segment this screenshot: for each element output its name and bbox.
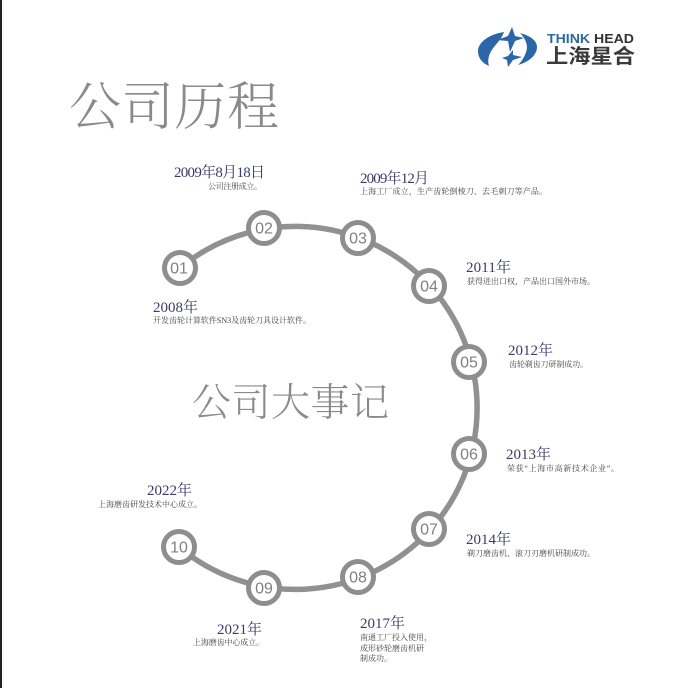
icon: blue swoosh emblem with stars: [478, 27, 537, 67]
event 2012: 2012年: [508, 341, 553, 359]
event 2009-08: [174, 163, 265, 191]
event 2022: 2022年: [147, 481, 192, 499]
node 08: 08: [349, 570, 367, 586]
node 05: [454, 346, 484, 378]
event 2017: 成形砂轮磨齿机研: [360, 643, 424, 653]
event 2012: 齿轮剃齿刀研制成功。: [509, 359, 588, 369]
event 2017: 2017年: [360, 614, 405, 632]
node 06: 06: [460, 446, 478, 464]
event 2021: 2021年: [217, 620, 262, 638]
event 2009-12: 2009年12月: [360, 169, 429, 187]
node 10: [164, 532, 194, 562]
node 01: [164, 252, 196, 284]
node 05: 05: [460, 354, 478, 372]
node 07: [414, 514, 444, 544]
event 2013: 2013年: [506, 445, 551, 463]
node 03: [342, 222, 374, 254]
node 08: [342, 562, 374, 592]
center heading: 公司大事记: [192, 372, 389, 428]
logo wordmark: THINK HEAD: [547, 32, 634, 46]
event 2009-08: 公司注册成立。: [208, 181, 262, 191]
event 2009-12: 上海工厂成立，生产齿轮倒棱刀、去毛刺刀等产品。: [360, 186, 547, 197]
event 2008: 2008年: [153, 298, 198, 316]
node 01: 01: [170, 260, 188, 278]
node 03: 03: [349, 230, 367, 248]
node 06: [454, 438, 484, 470]
event 2021: [193, 620, 264, 647]
node 02: [248, 212, 280, 244]
node 10: 10: [170, 540, 188, 556]
logo: [478, 27, 635, 69]
event 2012: [508, 341, 588, 369]
node 04: 04: [420, 278, 438, 296]
event 2014: [466, 530, 595, 558]
node 02: 02: [255, 220, 273, 238]
timeline arc: [179, 226, 477, 589]
event 2014: 剃刀磨齿机、滚刀刃磨机研制成功。: [467, 548, 595, 558]
event 2013: [506, 445, 619, 473]
node 04: [414, 270, 444, 302]
event 2022: 上海磨齿研发技术中心成立。: [98, 499, 202, 509]
node 07: 07: [420, 522, 438, 538]
event 2021: 上海磨齿中心成立。: [193, 637, 264, 647]
event 2008: 开发齿轮计算软件SN3及齿轮刀具设计软件。: [153, 315, 311, 325]
event 2009-12: [360, 169, 547, 197]
title: 公司历程: [69, 65, 279, 140]
event 2013: 荣获“上海市高新技术企业”。: [507, 463, 619, 473]
event 2011: 获得进出口权，产品出口国外市场。: [467, 276, 595, 287]
event 2008: [153, 298, 311, 325]
logo chinese name: 上海星合: [546, 40, 635, 69]
event 2022: [98, 481, 202, 509]
event 2017: 制成功。: [360, 653, 392, 663]
event 2011: [466, 258, 595, 287]
node 09: [248, 572, 280, 604]
event 2009-08: 2009年8月18日: [174, 163, 265, 181]
event 2017: 南通工厂投入使用，: [360, 632, 432, 643]
event 2017: [360, 614, 432, 663]
node 09: 09: [255, 580, 273, 598]
event 2014: 2014年: [466, 530, 511, 548]
event 2011: 2011年: [466, 258, 511, 276]
